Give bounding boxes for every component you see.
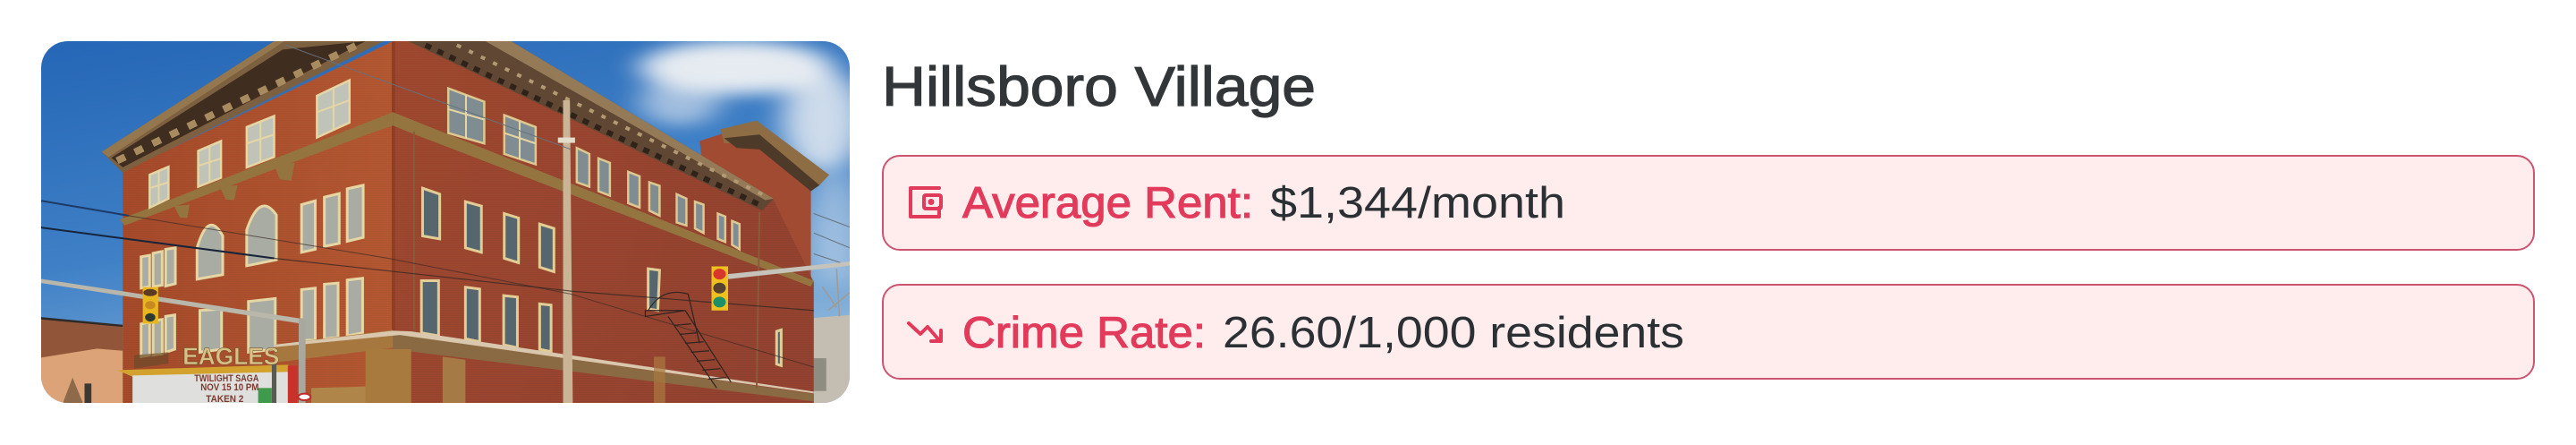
upper windows left [149, 81, 350, 208]
right face [393, 41, 814, 403]
utility pole [564, 100, 572, 403]
icon: wallet [911, 188, 941, 217]
ground floor stone band [274, 329, 814, 403]
window mullions [149, 88, 536, 203]
clouds [640, 40, 862, 287]
overhead wires [41, 45, 850, 367]
value: rent amount: $1,344/month [1270, 179, 1565, 227]
label: crime rate: Crime Rate: [962, 309, 1206, 357]
photo: brick Eagles building with theatre marquee [41, 41, 850, 403]
fire escape [645, 292, 731, 388]
marquee lettering: NOV 15 10 PM [200, 382, 258, 393]
corner shadow line [392, 41, 395, 333]
traffic arm left [41, 278, 306, 403]
downpipes [414, 132, 759, 388]
marquee [117, 352, 310, 403]
icon: trending down arrow [909, 323, 941, 341]
left face [123, 41, 393, 403]
value: crime figure: 26.60/1,000 residents [1223, 309, 1684, 357]
neighbouring buildings [41, 269, 850, 403]
marquee lettering: TWILIGHT SAGA [194, 373, 258, 384]
traffic arm right [712, 261, 850, 311]
marquee lettering [182, 343, 279, 405]
sky [41, 41, 850, 403]
heading: neighbourhood name: Hillsboro Village [882, 56, 1316, 118]
marquee lettering: EAGLES [182, 343, 279, 370]
stone bands [120, 112, 814, 287]
label: average rent: Average Rent: [962, 179, 1253, 227]
card: average rent [883, 156, 2534, 250]
middle and lower windows [421, 188, 781, 365]
left cornice [102, 41, 384, 173]
right cornice [409, 41, 774, 210]
upper windows right [448, 89, 740, 249]
card: crime rate [883, 285, 2534, 379]
rear tower [699, 121, 829, 397]
